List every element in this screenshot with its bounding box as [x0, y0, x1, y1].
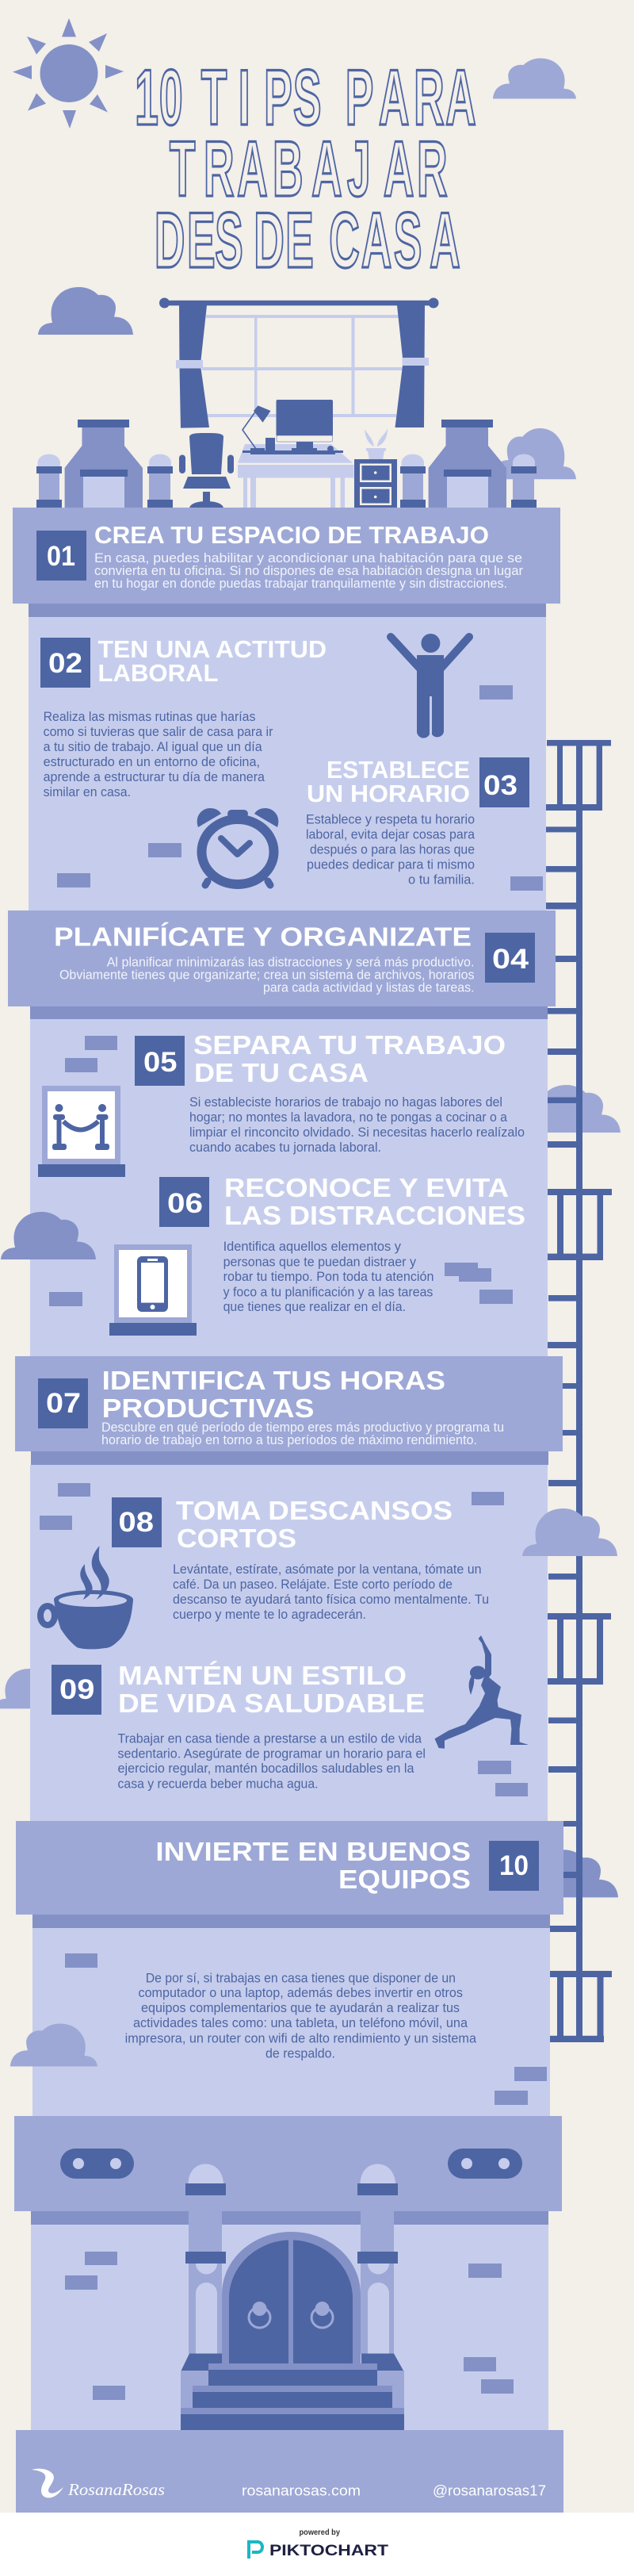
panel: tip 02: TEN UNA ACTITUD [98, 635, 327, 663]
title: TRABAJAR [170, 125, 448, 213]
title [135, 53, 476, 284]
panel: tip 03: 03 [483, 770, 518, 801]
icon: yoga pose silhouette [434, 1635, 529, 1749]
panel: tip 04: PLANIFÍCATE Y ORGANIZATE [54, 922, 472, 952]
icon: cloud over wall left [1, 1212, 96, 1259]
panel: tip 01 [13, 508, 560, 604]
panel: tip 01: en tu hogar en donde puedas trabajar tranquilamente y sin distracciones. [94, 577, 507, 591]
panel: tip 06: RECONOCE Y EVITA [224, 1173, 509, 1202]
panel: tip 02: similar en casa. [44, 784, 131, 799]
panel: tip 10 [16, 1821, 563, 1915]
title: 10 TIPS PARA [135, 53, 476, 141]
panel: tip 04: Obviamente tienes que organizarte; crea un sistema de archivos, horarios [59, 968, 474, 982]
icon: cloud right behind wall 05 [525, 1085, 621, 1133]
panel: tip 08: TOMA DESCANSOS [176, 1496, 453, 1525]
panel: tip 04 [8, 910, 556, 1006]
illustration: left column [185, 2164, 226, 2354]
illustration: right chimney tower [400, 420, 537, 508]
illustration: window with curtains [159, 298, 439, 428]
panel: footer: @rosanarosas17 [433, 2482, 546, 2498]
panel: tip 08: Levántate, estírate, asómate por la ventana, tómate un [173, 1562, 482, 1577]
panel: tip 07: IDENTIFICA TUS HORAS [102, 1366, 445, 1395]
panel: tip 02: LABORAL [98, 659, 219, 687]
illustration: left chimney tower [36, 420, 173, 508]
panel: tip 07: PRODUCTIVAS [102, 1393, 314, 1423]
panel: tip 06: 06 [167, 1188, 203, 1219]
panel: tip 02: a tu sitio de trabajo. Al igual que un día [44, 739, 262, 754]
panel: tip 05: hogar; no montes la lavadora, no te pongas a cocinar o a [189, 1110, 507, 1125]
panel: building top band [14, 2116, 562, 2211]
panel: tip 06: LAS DISTRACCIONES [224, 1201, 525, 1230]
panel: tip 02: Realiza las mismas rutinas que harías [44, 709, 255, 724]
panel: tip 06: que tienes que realizar en el día. [223, 1299, 406, 1314]
panel: tip 09: casa y recuerda beber mucha agua. [117, 1777, 319, 1791]
illustration: entrance door and steps [181, 2232, 404, 2430]
panel: tip 03: UN HORARIO [307, 780, 470, 807]
panel: footer: rosanarosas.com [242, 2482, 361, 2498]
panel: tip 03: laboral, evita dejar cosas para [306, 827, 476, 842]
text block: tip 10 body [125, 1970, 477, 2060]
panel: tip 08: cuerpo y mente te lo agradecerán. [173, 1607, 366, 1622]
panel: tip 04: 04 [492, 944, 529, 975]
footer: powered by Piktochart [249, 2528, 388, 2559]
panel: tip 08 [112, 1496, 489, 1622]
panel: tip 07: 07 [46, 1388, 81, 1419]
icon: person with raised arms [391, 634, 469, 738]
icon: cloud left of window [38, 287, 133, 335]
illustration: desk with computer [238, 400, 353, 508]
panel: tip 08: 08 [119, 1507, 154, 1538]
panel: tip 03: puedes dedicar para ti mismo [307, 857, 475, 872]
panel: tip 09: sedentario. Asegúrate de programar un horario para el [117, 1746, 426, 1761]
icon: cloud left behind wall 09 [0, 1669, 77, 1708]
panel: tip 05: cuando acabes tu jornada laboral. [189, 1140, 381, 1155]
icon: coffee cup with steam [40, 1546, 133, 1649]
panel: tip 09: Trabajar en casa tiende a prestarse a un estilo de vida [117, 1731, 422, 1746]
panel: building wall sections [29, 604, 550, 2430]
panel: tip 03 [306, 756, 529, 887]
illustration: office chair [179, 433, 234, 508]
panel: tip 08: café. Da un paseo. Relájate. Este corto período de [173, 1577, 453, 1592]
footer: powered by Piktochart: powered by [300, 2528, 340, 2537]
panel: tip 02: estructurado en un entorno de oficina, [44, 754, 260, 769]
panel: tip 05: 05 [143, 1047, 178, 1078]
icon: left vent [60, 2149, 134, 2179]
icon: sun [13, 18, 124, 128]
panel: tip 06: personas que te puedan distraer y [223, 1255, 416, 1269]
text block: tip 10 body: equipos complementarios que te ayudarán a realizar tus [141, 2000, 460, 2015]
icon: alarm clock [197, 808, 278, 885]
panel: tip 04: Al planificar minimizarás las distracciones y será más productivo. [107, 955, 474, 969]
title: DESDE CASA [155, 196, 460, 284]
text block: tip 10 body: computador o una laptop, además debes invertir en otros [138, 1985, 463, 2000]
panel: tip 08: CORTOS [177, 1524, 296, 1553]
text block: tip 10 body: de respaldo. [265, 2046, 335, 2060]
icon: cloud over wall bottom left [10, 2024, 97, 2067]
panel: tip 03: o tu familia. [408, 872, 475, 887]
text block: tip 10 body: impresora, un router con wifi de alto rendimiento y un sistema [125, 2030, 477, 2045]
illustration: plant pot [365, 428, 388, 460]
panel: tip 03: Establece y respeta tu horario [306, 811, 475, 826]
illustration: right column [357, 2164, 398, 2354]
panel: tip 09: ejercicio regular, mantén bocadillos saludables en la [117, 1761, 414, 1776]
panel: tip 06: robar tu tiempo. Pon toda tu atención [223, 1269, 434, 1284]
panel: tip 02: como si tuvieras que salir de casa para ir [44, 724, 273, 739]
panel: tip 09: 09 [59, 1674, 94, 1705]
panel: tip 06: y foco a tu planificación y a las tareas [223, 1285, 433, 1299]
icon: right vent [448, 2149, 522, 2179]
panel: tip 09: MANTÉN UN ESTILO [118, 1661, 407, 1690]
panel: footer [16, 2430, 563, 2513]
panel: tip 02: aprende a estructurar tu día de manera [44, 769, 265, 784]
panel: tip 10: INVIERTE EN BUENOS [155, 1837, 471, 1866]
wall bricks [40, 685, 547, 2400]
panel: tip 02 [40, 635, 327, 799]
panel: tip 03: ESTABLECE [327, 756, 470, 784]
panel: tip 05: limpiar el rinconcito olvidado. Si necesitas hacerlo realízalo [189, 1125, 525, 1140]
panel: tip 08: descanso te ayudará tanto física como mentalmente. Tu [173, 1592, 489, 1607]
panel: tip 07 [15, 1356, 563, 1451]
panel: tip 06: Identifica aquellos elementos y [223, 1239, 401, 1254]
panel: tip 10: 10 [499, 1850, 529, 1881]
panel: tip 03: después o para las horas que [310, 841, 475, 857]
panel: tip 09 [52, 1661, 426, 1791]
panel: tip 09: DE VIDA SALUDABLE [118, 1689, 425, 1718]
icon: cloud behind right chimney [491, 428, 576, 479]
panel: tip 06 [159, 1173, 525, 1314]
illustration: drawer cabinet [354, 459, 397, 508]
panel: tip 04: para cada actividad y listas de tareas. [263, 981, 474, 995]
panel: tip 07: horario de trabajo en torno a tus períodos de máximo rendimiento. [101, 1433, 477, 1447]
footer: powered by Piktochart: PIKTOCHART [269, 2542, 388, 2559]
icon: cloud top right [493, 59, 576, 98]
panel: tip 01: 01 [47, 541, 75, 572]
icon: cloud right behind panel 10 [523, 1850, 618, 1897]
fire escape ladder [545, 740, 612, 2042]
icon: cloud over wall right [522, 1508, 617, 1556]
text block: tip 10 body: actividades tales como: una tableta, un teléfono móvil, una [133, 2015, 468, 2030]
panel: tip 05: SEPARA TU TRABAJO [193, 1030, 506, 1060]
icon: window with rope barrier [38, 1086, 125, 1177]
panel: tip 02: 02 [48, 648, 82, 679]
panel: tip 05: DE TU CASA [194, 1058, 369, 1087]
panel: footer: RosanaRosas [67, 2480, 165, 2499]
text block: tip 10 body: De por sí, si trabajas en casa tienes que disponer de un [146, 1970, 456, 1985]
panel: tip 10: EQUIPOS [338, 1865, 471, 1894]
icon: window with smartphone [109, 1244, 197, 1336]
panel: tip 05 [135, 1030, 525, 1155]
panel: tip 05: Si estableciste horarios de trabajo no hagas labores del [189, 1094, 502, 1110]
panel: tip 01: convierta en tu oficina. Si no dispones de esa habitación designa un lugar [94, 564, 524, 578]
panel: tip 07: Descubre en qué período de tiempo eres más productivo y programa tu [101, 1420, 504, 1435]
panel: tip 01: CREA TU ESPACIO DE TRABAJO [94, 521, 489, 549]
panel: tip 01: En casa, puedes habilitar y acondicionar una habitación para que se [94, 551, 522, 565]
